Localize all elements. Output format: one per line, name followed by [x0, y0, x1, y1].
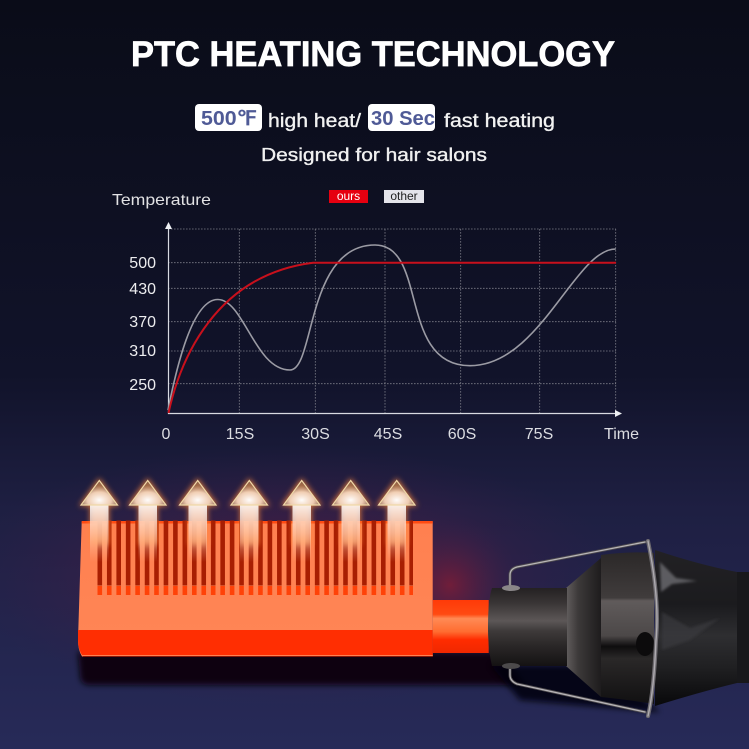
device handle: [488, 541, 749, 716]
side button: [636, 632, 654, 656]
x axis labels: 60S: [448, 426, 476, 443]
axes: [165, 222, 622, 417]
collar: [488, 588, 567, 666]
wire bail: [510, 541, 657, 716]
comb: heated comb head: [78, 521, 433, 656]
arrow 7: [376, 478, 418, 562]
comb body: [78, 522, 433, 656]
text: fast heating: fast heating: [444, 111, 555, 132]
arrow 4: [229, 478, 270, 562]
text: high heat: high heat/: [268, 111, 362, 132]
grid lines: [168, 229, 616, 413]
comb lower face: [78, 630, 433, 656]
handle grip: [655, 550, 749, 706]
legend: other: [384, 189, 424, 203]
heat arrows: [79, 478, 418, 562]
y axis labels: 250: [129, 377, 156, 394]
x axis labels: 75S: [525, 426, 553, 443]
comb top edge: [82, 521, 433, 524]
x axis labels: Time: [604, 426, 639, 443]
curve: other: [168, 245, 616, 410]
cylindrical band: [601, 552, 654, 704]
subtitle: heat and speed line: [195, 104, 555, 132]
y axis labels: 370: [129, 314, 156, 331]
title: PTC HEATING TECHNOLOGY: [131, 35, 615, 74]
grip facet highlights: [660, 562, 720, 650]
bail pivots: [502, 585, 520, 591]
badge: 500F: 500℉: [201, 108, 257, 130]
x axis labels: 15S: [226, 426, 254, 443]
x axis labels: [162, 426, 639, 443]
grip end segment: [737, 572, 749, 683]
legend: ours: ours: [337, 189, 360, 203]
legend: other: other: [390, 189, 418, 203]
subtitle: designed for hair salons: Designed for hair salons: [261, 145, 487, 165]
legend: ours: [329, 189, 368, 203]
badge: 500F: [195, 104, 262, 131]
arrow 6: [330, 478, 372, 562]
arrow 3: [177, 478, 218, 562]
arrow 5: [281, 478, 322, 562]
x axis labels: 0: [162, 426, 171, 443]
arrow 1: [79, 478, 120, 562]
y axis title: Temperature: [112, 192, 211, 209]
y axis labels: 430: [129, 281, 156, 298]
y axis labels: 500: [129, 255, 156, 272]
comb slots: [98, 553, 413, 590]
handle shadow: [490, 665, 660, 712]
badge: 30 Sec: 30 Sec: [371, 108, 435, 130]
y axis labels: 310: [129, 343, 156, 360]
x axis labels: 30S: [301, 426, 330, 443]
line chart: temperature over time: [112, 189, 639, 443]
shadow under device: [78, 652, 525, 685]
y axis labels: [129, 255, 156, 394]
arrow 2: [127, 478, 168, 562]
x axis labels: 45S: [374, 426, 402, 443]
orange shaft: [433, 600, 489, 653]
cone: [566, 558, 601, 697]
curve: ours: [168, 263, 616, 413]
